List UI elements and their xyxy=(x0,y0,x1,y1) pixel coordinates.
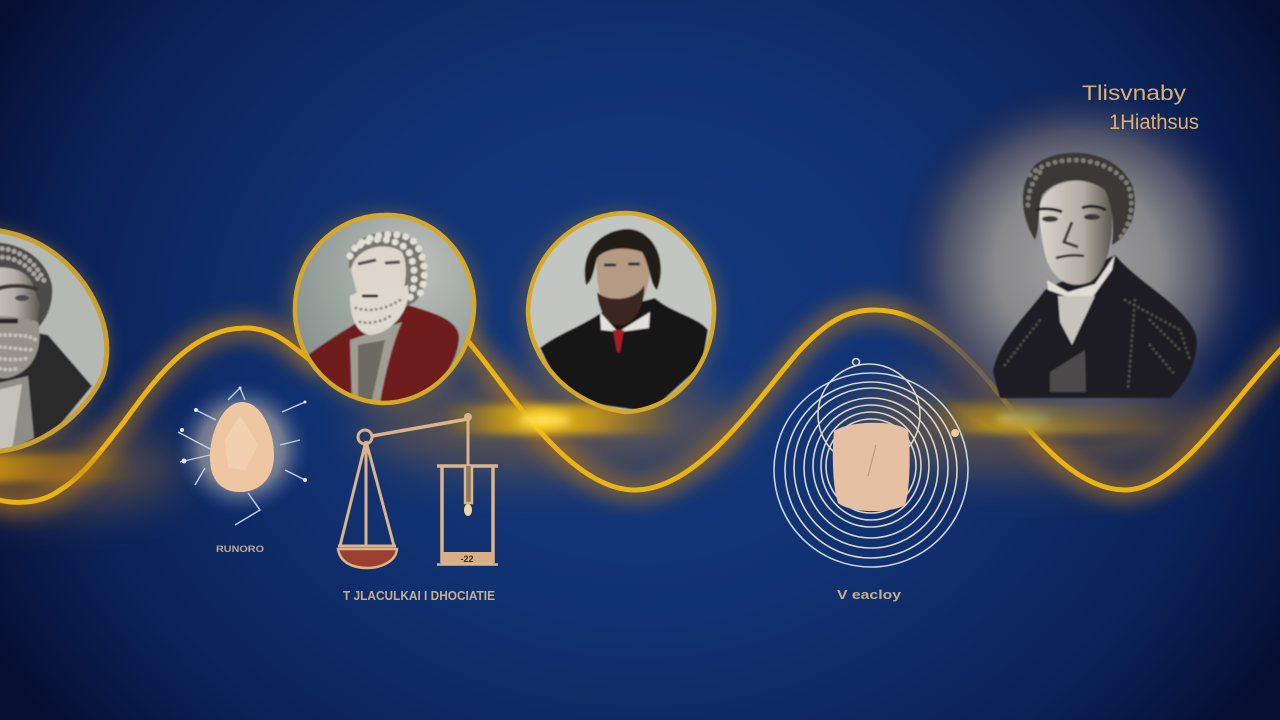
icon: measuring frame with plumb: -22 xyxy=(460,554,474,564)
portrait medallion: left bearded philosopher xyxy=(0,225,120,460)
icon: balance scale xyxy=(338,414,472,568)
portrait medallion: man in black coat xyxy=(521,210,721,415)
icon: glowing egg with crackling sparks xyxy=(174,380,310,525)
wave line: golden sine curve xyxy=(0,310,1280,502)
warm glow behind the wave xyxy=(0,375,1225,510)
label: scale: T JLACULKAI I DHOCIATIE xyxy=(343,588,495,603)
heading: top right caption xyxy=(1082,82,1199,134)
portrait: engraved man with halo, top right xyxy=(893,80,1263,450)
label: egg: RUNORO xyxy=(216,544,264,555)
label: orbits: V eacloy xyxy=(837,587,902,602)
heading: top right caption: 1Hiathsus xyxy=(1109,111,1199,134)
icon: concentric orbit lines around tablet xyxy=(774,358,968,567)
light streaks along the wave xyxy=(0,403,1170,482)
portrait medallion: philosopher in red robe xyxy=(286,210,482,410)
icon: measuring frame with plumb xyxy=(437,420,498,565)
heading: top right caption: Tlisvnaby xyxy=(1082,82,1187,105)
